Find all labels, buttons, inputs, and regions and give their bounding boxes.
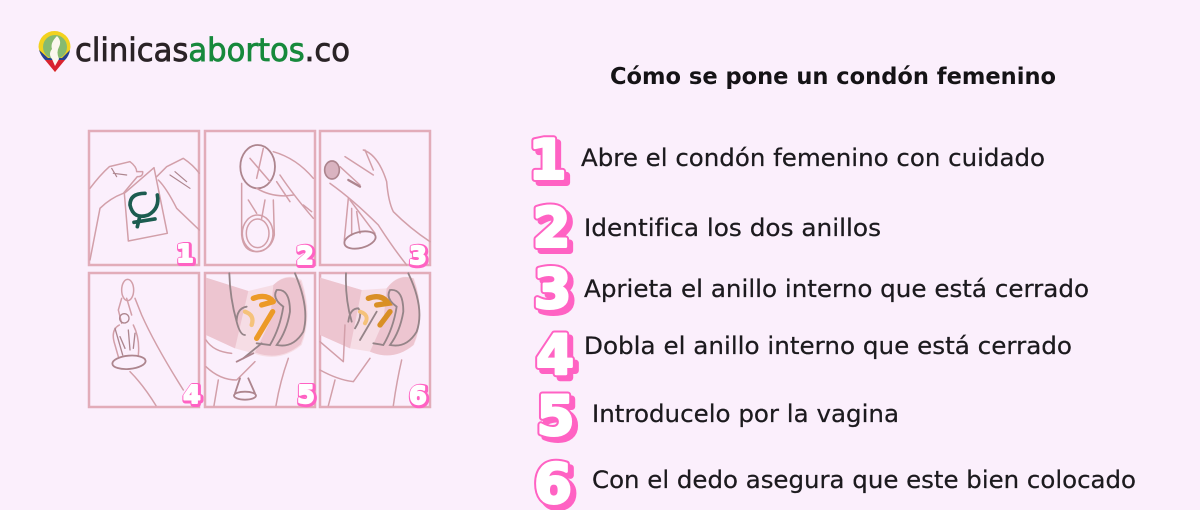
step 4 [536,324,1072,390]
step 3: 3 [538,262,575,324]
illustration grid: six steps [89,131,430,411]
step 5: 5 [541,388,578,452]
step 3: 3 [534,258,571,320]
step 4: Dobla el anillo interno que está cerrado [584,332,1072,360]
step 5: Introducelo por la vagina [592,400,899,428]
step 2 [533,196,881,264]
panel 3: squeezing inner ring [320,131,430,271]
step number 3: 3 [409,241,427,270]
step number 3: 3 [410,242,428,271]
step 4: 4 [536,324,574,386]
title: Cómo se pone un condón femenino [610,64,1056,90]
step number 2: 2 [296,241,314,270]
step 2: 2 [537,200,574,264]
step number 4: 4 [184,381,202,410]
step 6: Con el dedo asegura que este bien colocado [592,466,1136,494]
step 5 [537,384,899,452]
panel 2: two rings [205,131,315,271]
step 4: 4 [540,328,578,390]
step number 4: 4 [183,380,201,409]
step 1: 1 [529,128,566,192]
step number 2: 2 [297,242,315,271]
step 1 [529,128,1045,196]
step 6 [534,452,1136,510]
step 1: 1 [529,128,566,192]
step 3: 3 [534,258,571,320]
step number 5: 5 [298,381,316,410]
step number 6: 6 [409,381,427,410]
logo wordmark: clinicasabortos.co [75,31,350,69]
step 4: 4 [536,324,574,386]
step 3 [534,258,1089,324]
step number 6: 6 [410,382,428,411]
step 3: Aprieta el anillo interno que está cerrado [584,275,1089,303]
step list [529,128,1136,510]
step 1: 1 [533,132,570,196]
logo [38,31,350,72]
step 1: Abre el condón femenino con cuidado [581,144,1045,172]
panel 5: inserting condom [205,273,316,410]
step 5: 5 [537,384,574,448]
panel 4: folding inner ring [89,273,202,410]
step 2: Identifica los dos anillos [584,214,881,242]
step 2: 2 [533,196,570,260]
step number 1: 1 [177,240,195,269]
step number 5: 5 [297,380,315,409]
panel 1: opening the packet [89,131,199,269]
icon: map pin [38,31,70,72]
panel 6: checking placement [320,273,430,411]
step number 1: 1 [176,239,194,268]
step 2: 2 [533,196,570,260]
step 5: 5 [537,384,574,448]
